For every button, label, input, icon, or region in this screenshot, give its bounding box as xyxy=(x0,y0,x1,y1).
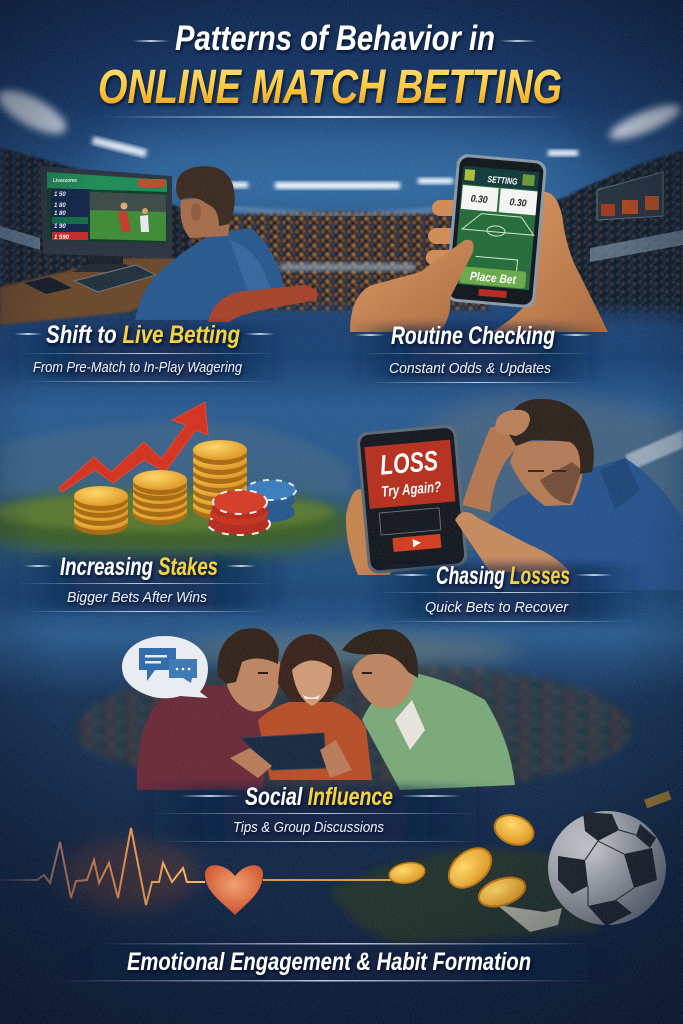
icon: bet ticket xyxy=(497,905,562,932)
pulse line xyxy=(0,828,205,905)
title dashes xyxy=(100,40,566,118)
title xyxy=(98,19,566,118)
icon: monitor: Livescores xyxy=(53,178,77,184)
crowd backdrop xyxy=(75,662,635,794)
icon: tablet xyxy=(241,733,326,770)
woman xyxy=(258,634,372,780)
pitch xyxy=(0,493,360,557)
heading: Shift to Live Betting xyxy=(46,321,240,349)
icon: monitor: 1 90 xyxy=(54,224,66,230)
icon: speech bubble xyxy=(122,636,208,698)
lower tier band xyxy=(280,263,415,271)
icon: monitor: 1 80 xyxy=(54,203,66,209)
label: emotional engagement xyxy=(55,943,625,982)
icon: coin stack small xyxy=(74,486,128,535)
floodlights xyxy=(0,82,683,189)
icon: phone showing loss xyxy=(356,424,468,574)
icon: phone with betting app: SETTING xyxy=(487,174,518,187)
panel: stage 6 emotional engagement scene xyxy=(0,791,672,945)
panel: stage 1 live betting scene xyxy=(0,166,318,325)
viewer in blue shirt xyxy=(135,166,286,320)
icon: phone showing loss: Try Again? xyxy=(381,479,442,501)
center stands xyxy=(190,211,490,312)
holding hand xyxy=(492,192,608,332)
panel: stadium backdrop xyxy=(0,82,683,345)
icon: scattered coins xyxy=(388,791,672,912)
icon: soccer ball xyxy=(548,811,666,926)
panel: stage 3 stakes background xyxy=(0,402,360,557)
panel: stage 4 chasing losses scene xyxy=(346,395,683,590)
icon: phone with betting app xyxy=(445,153,547,309)
heading: Social Influence xyxy=(245,783,393,811)
title line 1: Patterns of Behavior in xyxy=(175,19,495,58)
roof ring xyxy=(225,207,460,214)
subheading: Quick Bets to Recover xyxy=(425,599,569,616)
icon: monitor xyxy=(40,166,172,272)
gold line xyxy=(263,879,391,881)
hands xyxy=(230,740,352,778)
match video xyxy=(90,192,166,241)
heading: Routine Checking xyxy=(391,322,555,350)
stressed man xyxy=(462,399,683,590)
icon: monitor: 1 80 xyxy=(54,211,66,217)
desk xyxy=(0,258,175,325)
sky glow xyxy=(100,125,580,215)
icon: phone with betting app: 0.30 xyxy=(470,194,488,206)
subheading: Constant Odds & Updates xyxy=(389,360,551,377)
right stands xyxy=(535,150,683,325)
icon: phone showing loss: LOSS xyxy=(379,445,439,481)
title line 2: ONLINE MATCH BETTING xyxy=(98,61,562,114)
subheading: From Pre-Match to In-Play Wagering xyxy=(33,359,243,376)
icon: blue chips xyxy=(246,480,296,522)
heading: Increasing Stakes xyxy=(60,553,218,581)
heading: Emotional Engagement & Habit Formation xyxy=(127,948,531,976)
thumb xyxy=(455,512,570,572)
pitch speckle xyxy=(330,850,600,945)
icon: monitor: 1 50 xyxy=(54,192,66,198)
fade to blue xyxy=(0,310,683,345)
left friend xyxy=(137,628,280,790)
icon: heart xyxy=(205,865,263,915)
label: increasing stakes xyxy=(0,553,290,612)
left stands xyxy=(0,148,190,325)
icon: phone with betting app: 0.30 xyxy=(509,197,527,210)
holding hand xyxy=(346,489,395,575)
icon: coin stack medium xyxy=(133,470,187,525)
pointing hand xyxy=(350,240,474,332)
side banners xyxy=(0,226,40,250)
label: social influence xyxy=(130,783,500,842)
right friend xyxy=(342,629,515,790)
icon: tablet xyxy=(74,265,156,292)
icon: phone with betting app: Place Bet xyxy=(469,269,517,287)
panel: stage 5 social influence scene xyxy=(75,628,635,794)
subheading: Tips & Group Discussions xyxy=(233,819,384,836)
arrow: rising red trend xyxy=(59,402,208,492)
heading: Chasing Losses xyxy=(436,562,570,590)
label: chasing losses xyxy=(365,562,650,622)
chair xyxy=(208,285,318,322)
icon: smartphone on desk xyxy=(24,277,72,294)
icon: coin stack tall xyxy=(193,440,247,520)
banner streak xyxy=(625,430,683,470)
icon: red chips xyxy=(208,490,270,535)
phone fingers xyxy=(426,200,462,265)
scoreboard xyxy=(597,172,663,220)
label: shift to live betting xyxy=(0,321,290,382)
ecg glow xyxy=(60,840,200,910)
blurred stands xyxy=(0,422,350,495)
panel: stage 2 routine checking scene xyxy=(350,153,663,332)
icon: monitor: 1 590 xyxy=(54,235,70,241)
label: routine checking xyxy=(345,322,605,383)
subheading: Bigger Bets After Wins xyxy=(67,589,207,606)
blurred stadium xyxy=(390,395,683,560)
